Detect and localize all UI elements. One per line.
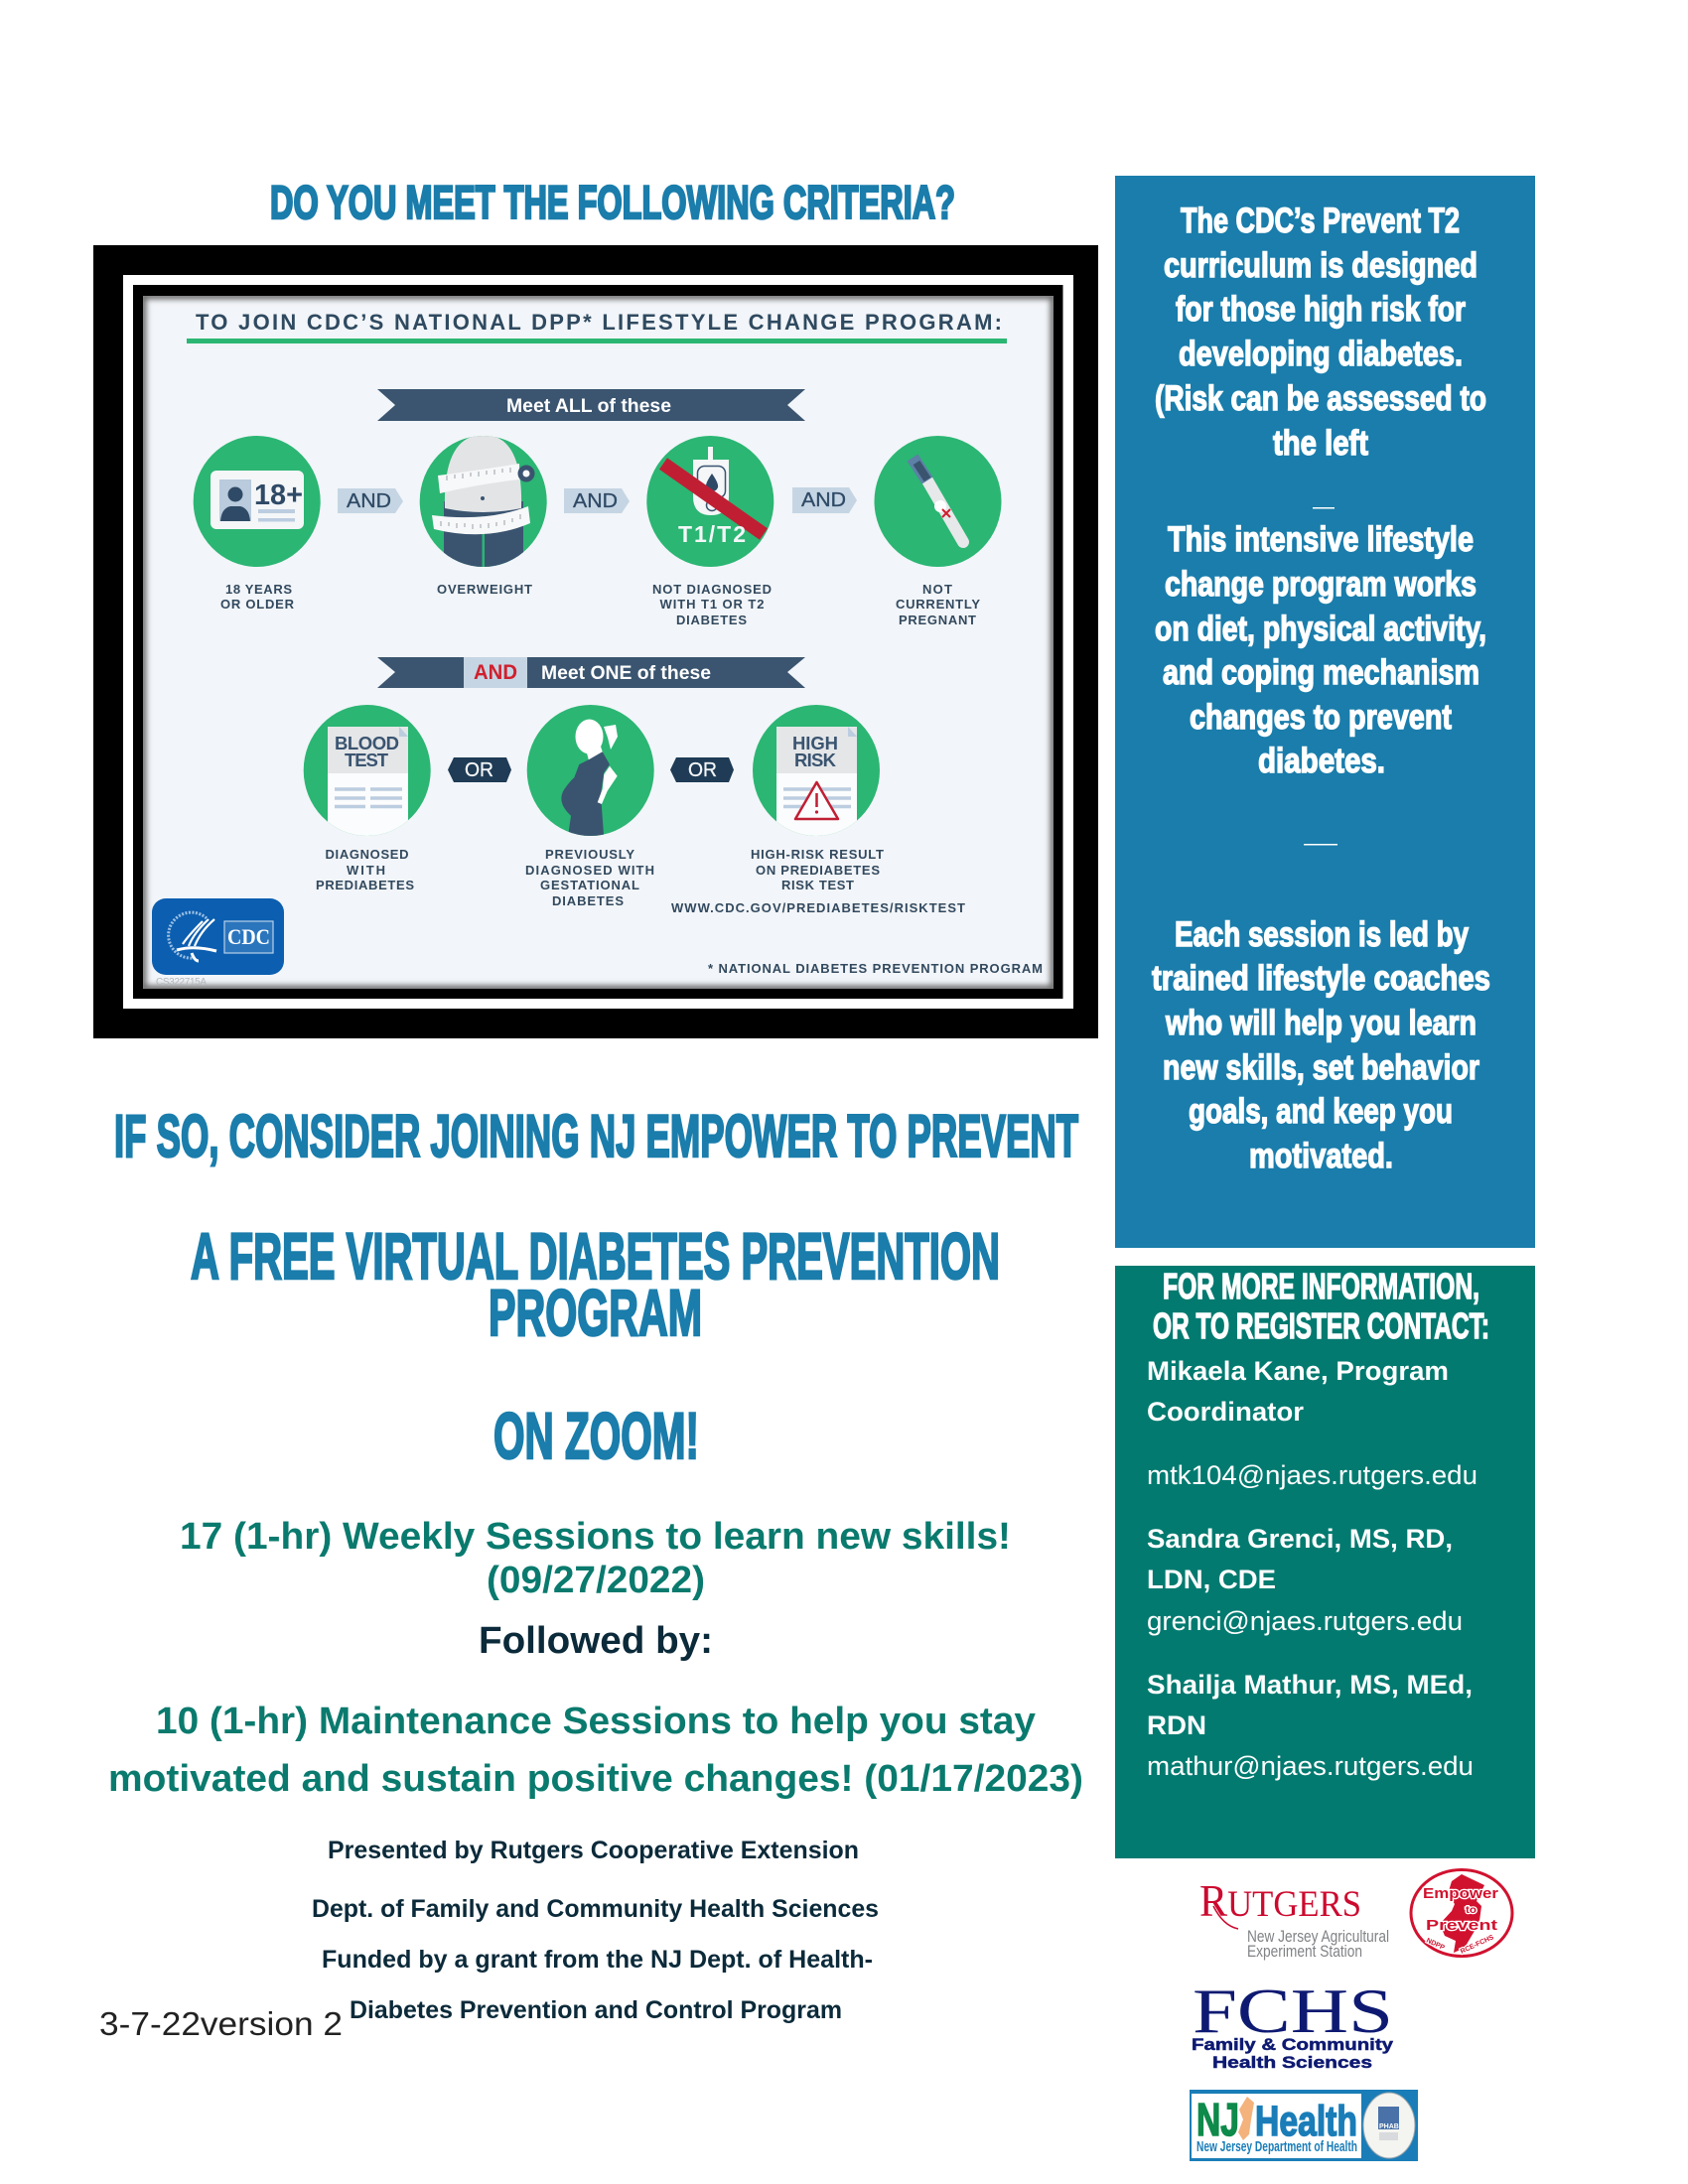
contact list: mtk104@njaes.rutgers.edu bbox=[1147, 1460, 1477, 1490]
text: credits: Funded by a grant from the NJ Dept. of Health- bbox=[322, 1946, 873, 1974]
label: overweight: OVERWEIGHT bbox=[437, 582, 532, 597]
logo: Empower to Prevent: RCE-FCHS bbox=[1460, 1934, 1495, 1956]
panel: program description: trained lifestyle coaches bbox=[1152, 959, 1490, 998]
panel: program description: changes to prevent bbox=[1190, 698, 1452, 737]
label: gestational diabetes: DIAGNOSED WITH bbox=[525, 863, 654, 878]
label: 18 years or older bbox=[220, 582, 295, 612]
icon: blood test bbox=[304, 705, 431, 841]
logo: Empower to Prevent: Empower bbox=[1423, 1885, 1498, 1902]
icon: high risk: HIGH bbox=[792, 733, 838, 753]
label: gestational diabetes: DIABETES bbox=[552, 893, 624, 908]
panel: program description bbox=[1115, 176, 1535, 1248]
logo: Empower to Prevent: to bbox=[1466, 1905, 1477, 1916]
arrow: or 1: OR bbox=[465, 759, 493, 781]
logo: NJ Health: New Jersey Department of Health bbox=[1196, 2138, 1357, 2155]
banner: and meet one: AND bbox=[474, 661, 517, 684]
logo: NJ Health: PHAB bbox=[1379, 2123, 1399, 2130]
logo: Empower to Prevent bbox=[1411, 1870, 1512, 1956]
contact heading: OR TO REGISTER CONTACT: bbox=[1153, 1305, 1489, 1346]
banner: and meet one: Meet ONE of these bbox=[541, 663, 711, 684]
banner: meet all: Meet ALL of these bbox=[506, 396, 671, 417]
panel: program description: and coping mechanism bbox=[1163, 653, 1479, 692]
panel: program description: for those high risk for bbox=[1176, 290, 1466, 329]
panel: program description: curriculum is designed bbox=[1164, 246, 1477, 285]
label: high risk result: RISK TEST bbox=[781, 878, 854, 892]
arrow: and 3 bbox=[792, 487, 857, 513]
link: risk test url: WWW.CDC.GOV/PREDIABETES/RISKTEST bbox=[671, 900, 965, 915]
icon: blood test: BLOOD bbox=[335, 733, 399, 753]
contact list: RDN bbox=[1147, 1710, 1206, 1740]
text: weekly sessions: 17 (1-hr) Weekly Sessions to learn new skills! bbox=[180, 1516, 1011, 1558]
text: credits: Diabetes Prevention and Control Program bbox=[350, 1996, 842, 2024]
contact heading bbox=[1153, 1266, 1489, 1346]
contact list: Mikaela Kane, Program bbox=[1147, 1356, 1449, 1386]
logo: Rutgers bbox=[1199, 1876, 1389, 1961]
heading: free virtual program bbox=[191, 1219, 1000, 1349]
contact list bbox=[1147, 1356, 1477, 1781]
logo: CDC bbox=[152, 898, 284, 975]
banner: meet all bbox=[377, 389, 805, 421]
label: not diagnosed: WITH T1 OR T2 bbox=[659, 597, 765, 612]
label: high risk result: ON PREDIABETES bbox=[756, 863, 880, 878]
logo: FCHS bbox=[1192, 1977, 1394, 2072]
contact list: mathur@njaes.rutgers.edu bbox=[1147, 1751, 1474, 1781]
logo: FCHS: FCHS bbox=[1193, 1977, 1393, 2046]
heading: consider joining: IF SO, CONSIDER JOINING NJ EMPOWER TO PREVENT bbox=[114, 1103, 1078, 1169]
text: maintenance sessions: motivated and sustain positive changes! (01/17/2023) bbox=[108, 1758, 1083, 1800]
panel: program description: This intensive lifestyle bbox=[1168, 520, 1474, 559]
text: maintenance sessions: 10 (1-hr) Maintenance Sessions to help you stay bbox=[156, 1701, 1036, 1742]
infographic title: TO JOIN CDC’S NATIONAL DPP* LIFESTYLE CHANGE PROGRAM: bbox=[196, 310, 1002, 335]
icon: not diagnosed T1/T2: T1/T2 bbox=[678, 521, 746, 547]
heading: on zoom: ON ZOOM! bbox=[493, 1399, 699, 1472]
panel: program description: The CDC’s Prevent T2 bbox=[1181, 202, 1460, 240]
label: not diagnosed bbox=[652, 582, 772, 627]
icon: 18 years or older: 18+ bbox=[254, 479, 303, 511]
label: gestational diabetes: PREVIOUSLY bbox=[545, 847, 634, 862]
label: diagnosed with prediabetes bbox=[316, 847, 414, 892]
arrow: and 1: AND bbox=[347, 490, 391, 512]
icon: 18 years or older bbox=[194, 436, 321, 567]
label: diagnosed with prediabetes: DIAGNOSED bbox=[326, 847, 409, 862]
icon: overweight bbox=[420, 435, 547, 571]
label: not pregnant bbox=[896, 582, 980, 627]
text: maintenance sessions bbox=[108, 1701, 1083, 1800]
label: not diagnosed: NOT DIAGNOSED bbox=[652, 582, 772, 597]
arrow: or 2 bbox=[670, 757, 734, 782]
text: followed by: Followed by: bbox=[479, 1620, 713, 1662]
text: version note: 3-7-22version 2 bbox=[99, 2005, 343, 2042]
logo: Empower to Prevent: NDPP bbox=[1425, 1937, 1446, 1952]
icon: pregnant woman bbox=[527, 705, 654, 839]
logo: Rutgers: New Jersey Agricultural bbox=[1247, 1927, 1389, 1946]
arrow: and 2: AND bbox=[573, 490, 618, 512]
contact heading: FOR MORE INFORMATION, bbox=[1163, 1266, 1479, 1306]
heading: do you meet the criteria: DO YOU MEET THE FOLLOWING CRITERIA? bbox=[270, 176, 955, 228]
arrow: and 2 bbox=[564, 488, 630, 513]
icon: high risk bbox=[753, 705, 880, 841]
contact list: grenci@njaes.rutgers.edu bbox=[1147, 1606, 1463, 1636]
logo: NJ Health bbox=[1190, 2090, 1418, 2161]
banner: and meet one bbox=[377, 657, 805, 688]
label: not pregnant: CURRENTLY bbox=[896, 597, 980, 612]
icon: not diagnosed T1/T2 bbox=[646, 436, 774, 567]
panel: program description: goals, and keep you bbox=[1189, 1092, 1453, 1131]
arrow: or 2: OR bbox=[688, 759, 717, 781]
text: credits: Dept. of Family and Community Health Sciences bbox=[312, 1895, 879, 1923]
panel: program description: Each session is led by bbox=[1175, 915, 1469, 954]
text: credits: Presented by Rutgers Cooperative Extension bbox=[328, 1837, 859, 1864]
arrow: and 1 bbox=[338, 488, 403, 513]
footnote: * NATIONAL DIABETES PREVENTION PROGRAM bbox=[708, 961, 1043, 976]
icon: pregnancy test bbox=[874, 436, 1001, 567]
label: not pregnant: NOT bbox=[922, 582, 952, 597]
label: 18 years or older: 18 YEARS bbox=[225, 582, 292, 597]
panel: criteria infographic in black frame bbox=[93, 245, 1098, 1038]
logo: Rutgers: RUTGERS bbox=[1199, 1876, 1361, 1926]
panel: program description: new skills, set behavior bbox=[1163, 1048, 1479, 1087]
panel: program description: motivated. bbox=[1249, 1137, 1393, 1175]
panel: program description: developing diabetes. bbox=[1179, 335, 1463, 373]
logo: CDC: CDC bbox=[227, 924, 270, 949]
panel: program description: change program works bbox=[1165, 565, 1477, 604]
panel: program description: diabetes. bbox=[1258, 742, 1385, 780]
label: not pregnant: PREGNANT bbox=[899, 613, 976, 627]
label: diagnosed with prediabetes: WITH bbox=[347, 863, 385, 878]
logo: FCHS: Health Sciences bbox=[1212, 2053, 1372, 2072]
contact list: LDN, CDE bbox=[1147, 1565, 1276, 1594]
heading: free virtual program: PROGRAM bbox=[489, 1276, 702, 1349]
logo: NJ Health: Health bbox=[1255, 2098, 1357, 2145]
panel: program description: on diet, physical activity, bbox=[1155, 610, 1486, 648]
contact list: Sandra Grenci, MS, RD, bbox=[1147, 1524, 1453, 1554]
label: gestational diabetes bbox=[525, 847, 654, 908]
label: not diagnosed: DIABETES bbox=[676, 613, 747, 627]
panel: program description: (Risk can be assessed to bbox=[1155, 379, 1486, 418]
text: weekly sessions bbox=[180, 1516, 1011, 1601]
publication code: CS322715A bbox=[156, 977, 207, 988]
text: weekly sessions: (09/27/2022) bbox=[487, 1560, 705, 1601]
panel: program description: who will help you learn bbox=[1165, 1004, 1477, 1042]
arrow: and 3: AND bbox=[801, 489, 846, 511]
label: diagnosed with prediabetes: PREDIABETES bbox=[316, 878, 414, 892]
heading: free virtual program: A FREE VIRTUAL DIABETES PREVENTION bbox=[191, 1219, 1000, 1293]
label: 18 years or older: OR OLDER bbox=[220, 597, 295, 612]
logo: FCHS: Family & Community bbox=[1192, 2035, 1394, 2054]
label: gestational diabetes: GESTATIONAL bbox=[540, 878, 639, 892]
panel: contact information bbox=[1115, 1266, 1535, 1858]
panel: program description: the left bbox=[1273, 424, 1368, 463]
text: credits bbox=[312, 1837, 879, 2024]
logo: Rutgers: Experiment Station bbox=[1247, 1942, 1362, 1961]
label: high risk result bbox=[751, 847, 884, 892]
arrow: or 1 bbox=[448, 757, 511, 782]
logo: Empower to Prevent: Prevent bbox=[1426, 1917, 1497, 1934]
icon: blood test: TEST bbox=[345, 750, 389, 770]
label: high risk result: HIGH-RISK RESULT bbox=[751, 847, 884, 862]
contact list: Coordinator bbox=[1147, 1397, 1304, 1427]
icon: high risk: RISK bbox=[794, 750, 837, 770]
contact list: Shailja Mathur, MS, MEd, bbox=[1147, 1670, 1473, 1700]
logo: NJ Health: NJ bbox=[1196, 2094, 1239, 2145]
